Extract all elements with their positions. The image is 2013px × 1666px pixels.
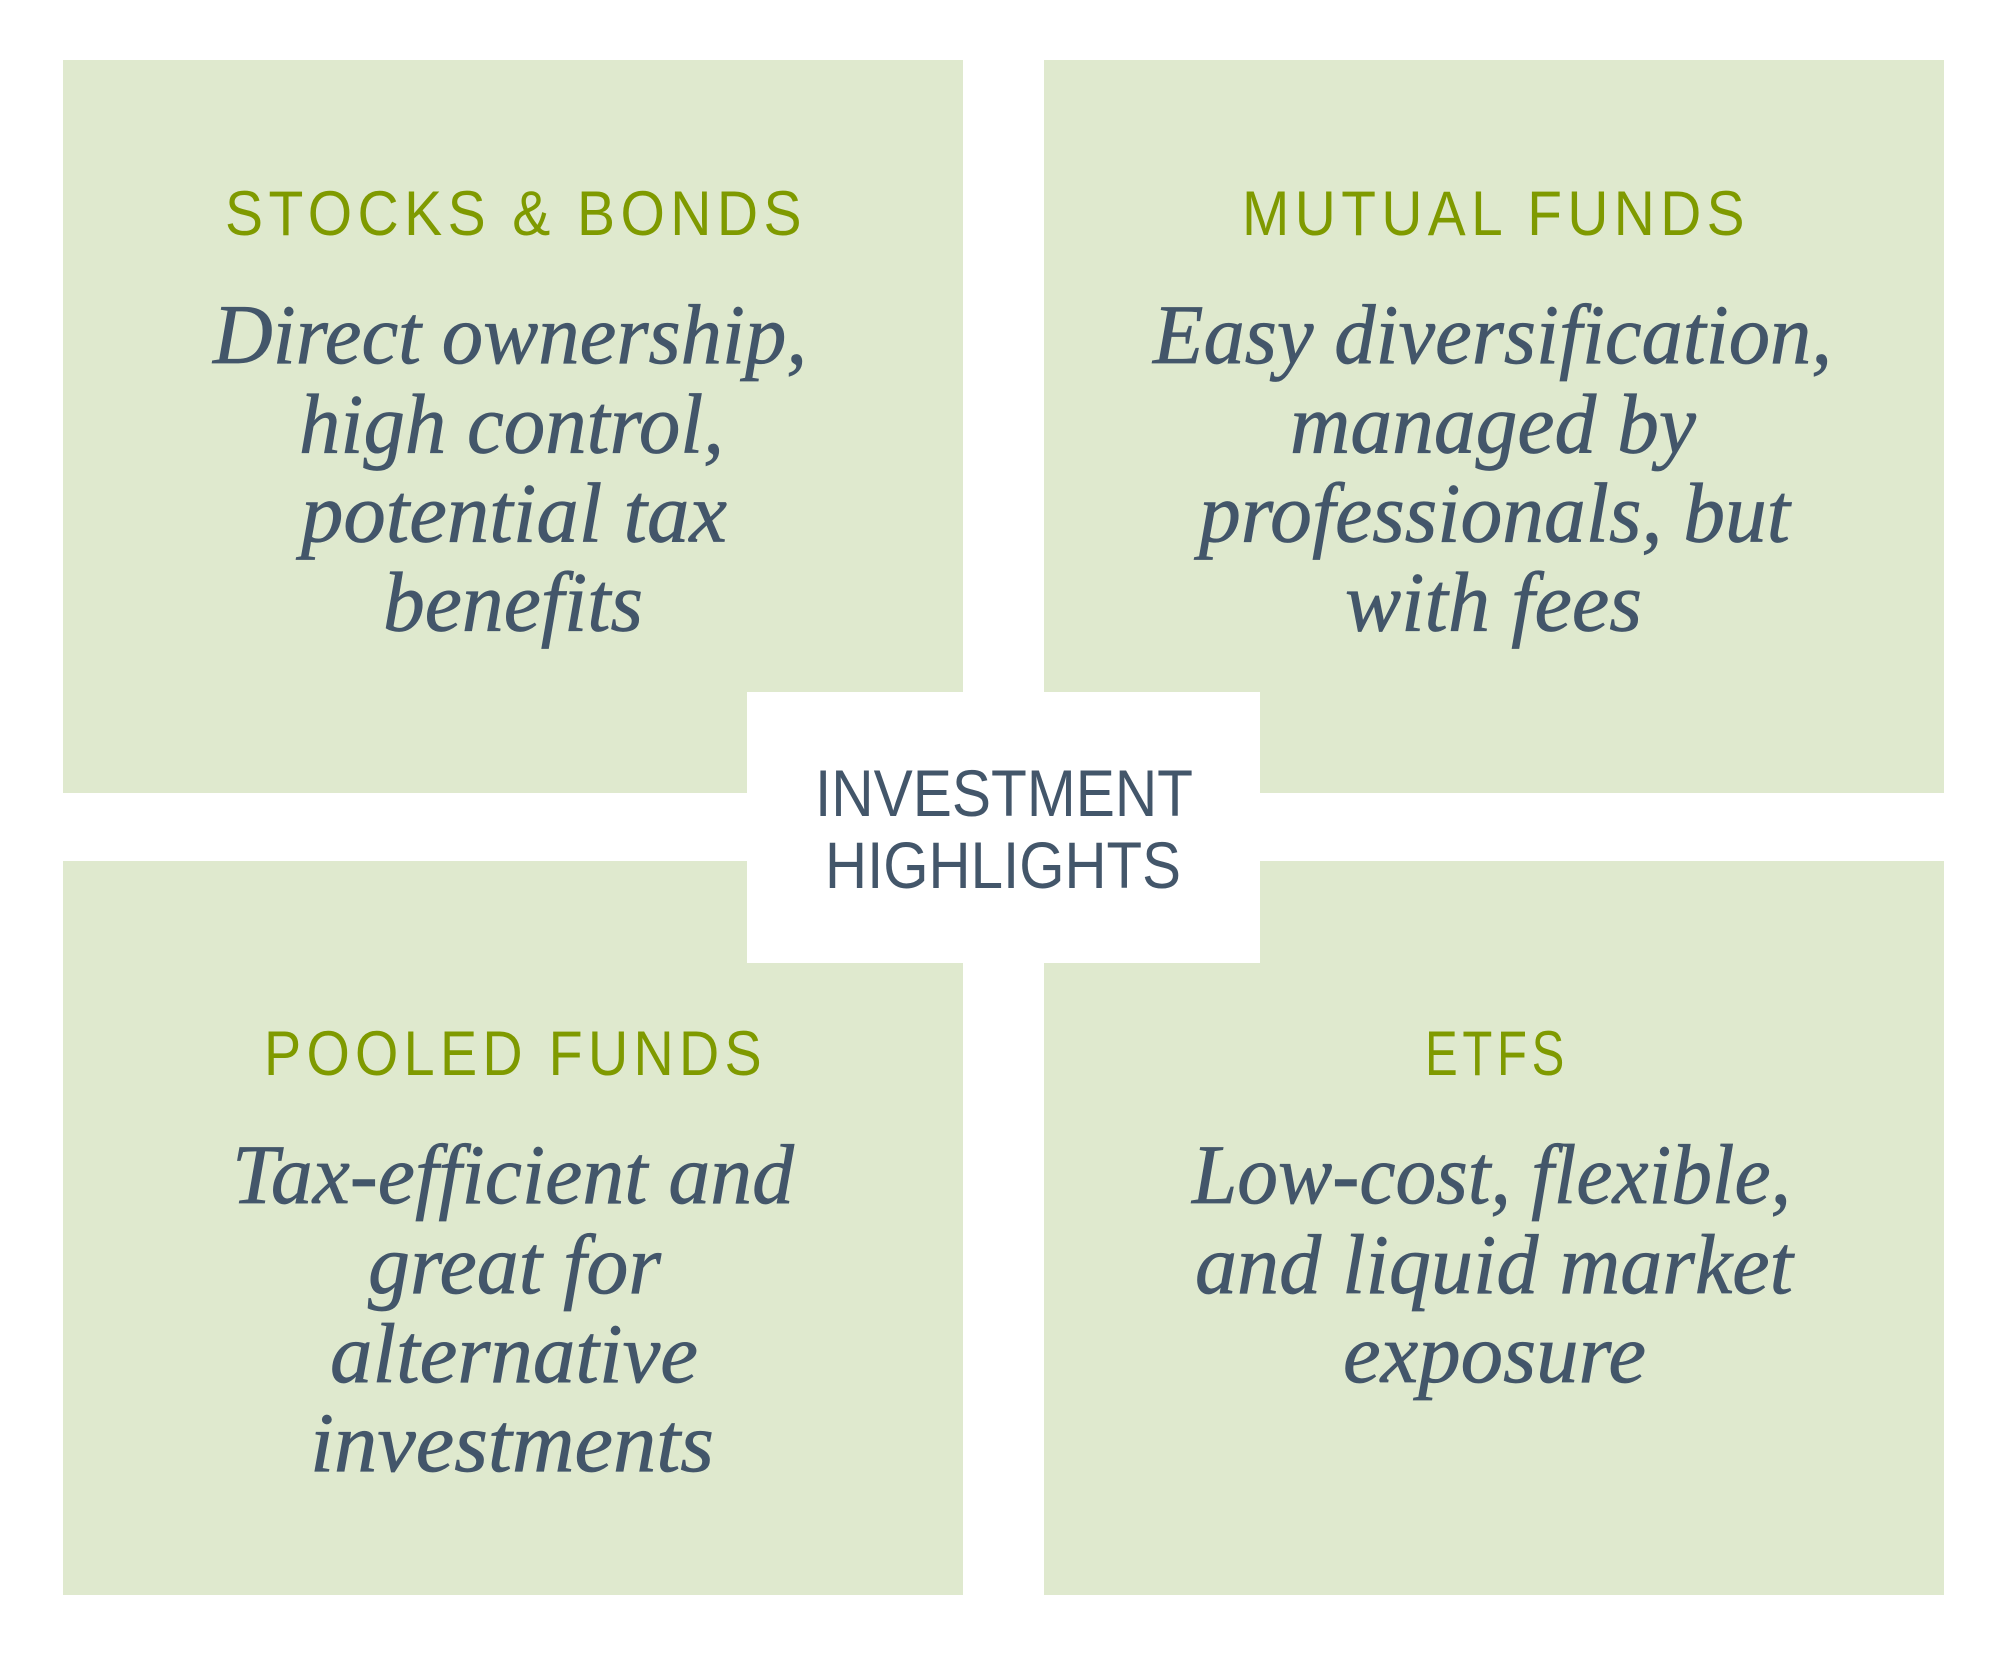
text block: mutual funds description: professionals, but xyxy=(1194,466,1792,560)
panel: stocks and bonds xyxy=(63,60,963,793)
center title box xyxy=(747,692,1260,963)
heading: stocks and bonds: STOCKS & BONDS xyxy=(225,179,807,249)
heading: mutual funds: MUTUAL FUNDS xyxy=(1242,179,1750,249)
text block: stocks and bonds description: potential tax xyxy=(296,466,727,560)
title: INVESTMENT xyxy=(815,756,1193,830)
text block: stocks and bonds description: high control, xyxy=(299,378,724,472)
text block: ETFs description: and liquid market xyxy=(1195,1218,1795,1312)
text block: pooled funds description: great for xyxy=(368,1218,662,1312)
text block: pooled funds description xyxy=(232,1128,794,1490)
panel: mutual funds xyxy=(1044,60,1944,793)
panel: pooled funds xyxy=(63,861,963,1595)
text block: mutual funds description xyxy=(1152,288,1832,650)
text block: stocks and bonds description: benefits xyxy=(383,556,643,650)
heading: ETFs: ETFS xyxy=(1425,1019,1569,1089)
text block: pooled funds description: Tax-efficient and xyxy=(232,1128,794,1222)
text block: pooled funds description: investments xyxy=(310,1396,714,1490)
text block: ETFs description: Low-cost, flexible, xyxy=(1191,1128,1791,1222)
panel: ETFs xyxy=(1044,861,1944,1595)
text block: ETFs description: exposure xyxy=(1343,1307,1646,1401)
text block: mutual funds description: Easy diversification, xyxy=(1152,288,1832,382)
text block: stocks and bonds description xyxy=(212,288,807,650)
text block: mutual funds description: managed by xyxy=(1290,378,1696,472)
text block: pooled funds description: alternative xyxy=(330,1307,698,1401)
heading: pooled funds: POOLED FUNDS xyxy=(264,1019,767,1089)
title xyxy=(815,756,1193,902)
text block: mutual funds description: with fees xyxy=(1345,556,1642,650)
text block: ETFs description xyxy=(1191,1128,1795,1401)
text block: stocks and bonds description: Direct ownership, xyxy=(212,288,807,382)
title: HIGHLIGHTS xyxy=(825,828,1181,902)
